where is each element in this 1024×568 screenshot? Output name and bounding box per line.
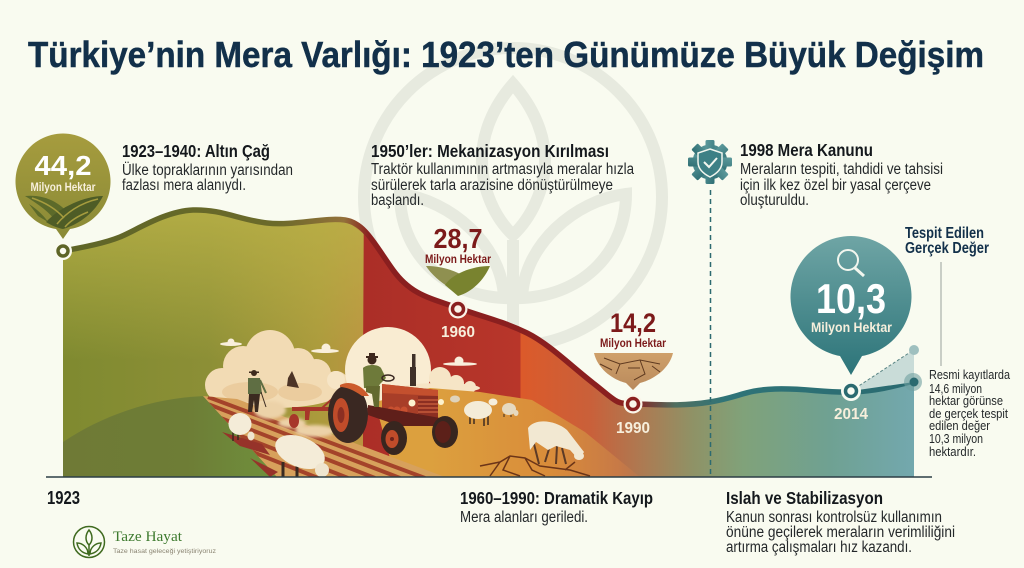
label: detected real value bbox=[905, 225, 989, 257]
rear wheel bbox=[328, 385, 368, 443]
marker 1990: 14,2 bbox=[610, 308, 656, 338]
sheep large bbox=[275, 435, 329, 476]
icon: magnifier bbox=[838, 250, 864, 276]
node bbox=[54, 242, 72, 260]
marker 1990 bbox=[594, 308, 673, 437]
marker 1960: 1960 bbox=[441, 324, 475, 341]
curve line bbox=[63, 210, 914, 405]
exhaust pipe bbox=[410, 367, 416, 386]
text: recovery: Kanun sonrası kontrolsüz kullanımın bbox=[726, 509, 942, 526]
label: detected real value: Gerçek Değer bbox=[905, 240, 989, 257]
farmer one bbox=[248, 370, 266, 412]
brand logo: Taze hasat geleceği yetiştiriyoruz bbox=[113, 549, 216, 555]
sheep middle bbox=[464, 398, 498, 426]
marker 1990: Milyon Hektar bbox=[600, 338, 666, 350]
area chart bbox=[63, 210, 914, 480]
skinny sheep bbox=[528, 421, 584, 464]
text: 1960-1990 bbox=[460, 488, 653, 526]
marker 1960: Milyon Hektar bbox=[425, 254, 491, 266]
text: 1923-1940 bbox=[122, 141, 293, 194]
text: 1998 law: 1998 Mera Kanunu bbox=[740, 140, 873, 160]
distant sheep bbox=[450, 396, 460, 402]
pin shape bbox=[16, 134, 111, 239]
pin 2014: 2014 bbox=[834, 406, 868, 423]
dashed law marker bbox=[710, 190, 712, 477]
watermark leaf logo bbox=[364, 48, 662, 346]
leaf field icon bbox=[426, 266, 490, 296]
ploughed stripes bbox=[200, 395, 450, 480]
text: 1950s: sürülerek tarla arazisine dönüştürülmeye bbox=[371, 177, 613, 194]
text: 1950s bbox=[371, 141, 634, 209]
callout text: 10,3 milyon bbox=[929, 431, 983, 446]
callout text: hektar görünse bbox=[929, 393, 1003, 408]
farm scene illustration bbox=[63, 327, 640, 480]
text: recovery: önüne geçilerek meraların verimliliğini bbox=[726, 524, 955, 541]
cracked earth bbox=[480, 456, 590, 476]
plough bbox=[289, 399, 332, 428]
brand logo: Taze Hayat bbox=[113, 529, 183, 545]
small white clouds bbox=[220, 338, 477, 366]
text: 1998 law bbox=[740, 140, 943, 209]
field icon bbox=[25, 196, 103, 229]
dust clouds bbox=[205, 327, 480, 413]
red tractor bbox=[328, 353, 458, 455]
text: 1950s: başlandı. bbox=[371, 192, 424, 209]
green hill bbox=[63, 396, 277, 477]
pin 2014: 10,3 bbox=[816, 275, 886, 322]
value: 44,2 bbox=[34, 150, 92, 181]
pin 2014 bbox=[790, 236, 912, 423]
text: 1950s: 1950’ler: Mekanizasyon Kırılması bbox=[371, 141, 609, 161]
cracked soil icon bbox=[594, 353, 673, 390]
marker 1990: 1990 bbox=[616, 420, 650, 437]
text: recovery: Islah ve Stabilizasyon bbox=[726, 488, 883, 508]
text: 1998 law: Meraların tespiti, tahdidi ve tahsisi bbox=[740, 161, 943, 178]
orange ground bbox=[375, 388, 640, 477]
fender bbox=[340, 383, 369, 396]
logo mark bbox=[74, 526, 104, 558]
text: 1960-1990: Mera alanları geriledi. bbox=[460, 509, 588, 526]
callout leader line bbox=[940, 262, 942, 366]
callout text: edilen değer bbox=[929, 418, 991, 433]
label: detected real value: Tespit Edilen bbox=[905, 225, 984, 242]
text: 1998 law: için ilk kez özel bir yasal çerçeve bbox=[740, 177, 931, 194]
text: 1923-1940: Ülke topraklarının yarısından bbox=[122, 161, 293, 179]
text: recovery bbox=[726, 488, 955, 556]
marker 1960: 28,7 bbox=[434, 223, 482, 254]
chart area fill bbox=[63, 210, 914, 477]
text: 1960-1990: 1960–1990: Dramatik Kayıp bbox=[460, 488, 653, 508]
front wheels bbox=[381, 421, 407, 455]
callout text bbox=[929, 367, 1011, 459]
sheep right bbox=[502, 403, 518, 417]
sheep left bbox=[228, 413, 254, 441]
unit: Milyon Hektar bbox=[30, 182, 96, 194]
text: 1923-1940: 1923–1940: Altın Çağ bbox=[122, 141, 270, 161]
dust at plough bbox=[254, 401, 335, 437]
icon: gear shield bbox=[688, 140, 732, 184]
brand logo bbox=[74, 526, 216, 558]
pin 1923 bbox=[16, 134, 111, 260]
hump highlight bbox=[63, 210, 364, 360]
marker 1960 bbox=[425, 223, 491, 341]
pin 2014: Milyon Hektar bbox=[811, 319, 892, 335]
estimated value wedge bbox=[851, 345, 922, 391]
callout text: hektardır. bbox=[929, 444, 976, 459]
driver bbox=[363, 365, 386, 388]
text: recovery: artırma çalışmaları hız kazandı. bbox=[726, 539, 912, 556]
red soil patches bbox=[222, 432, 278, 477]
callout text: Resmi kayıtlarda bbox=[929, 367, 1011, 382]
tractor body bbox=[382, 384, 438, 414]
text: 1950s: Traktör kullanımının artmasıyla meralar hızla bbox=[371, 161, 634, 178]
baseline axis bbox=[46, 476, 932, 478]
text: 1923-1940: fazlası mera alanıydı. bbox=[122, 177, 246, 194]
year label 1923: 1923 bbox=[47, 488, 80, 508]
farmer two bbox=[287, 371, 299, 388]
text: 1998 law: oluşturuldu. bbox=[740, 192, 809, 209]
callout text: 14,6 milyon bbox=[929, 381, 982, 396]
callout text: de gerçek tespit bbox=[929, 406, 1008, 421]
